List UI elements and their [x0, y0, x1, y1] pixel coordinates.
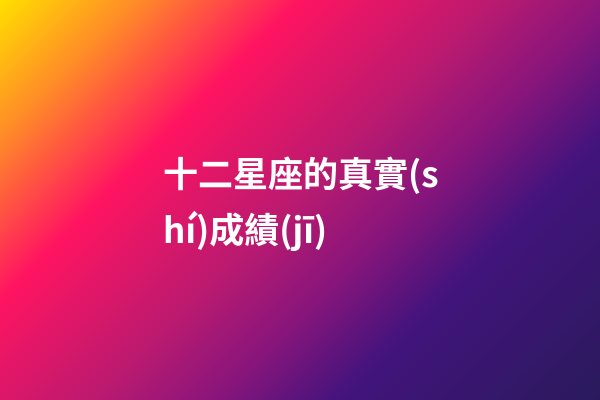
title — [163, 147, 439, 254]
title: hí)成績(jī) — [163, 203, 327, 254]
title: 十二星座的真實(s — [163, 147, 439, 198]
